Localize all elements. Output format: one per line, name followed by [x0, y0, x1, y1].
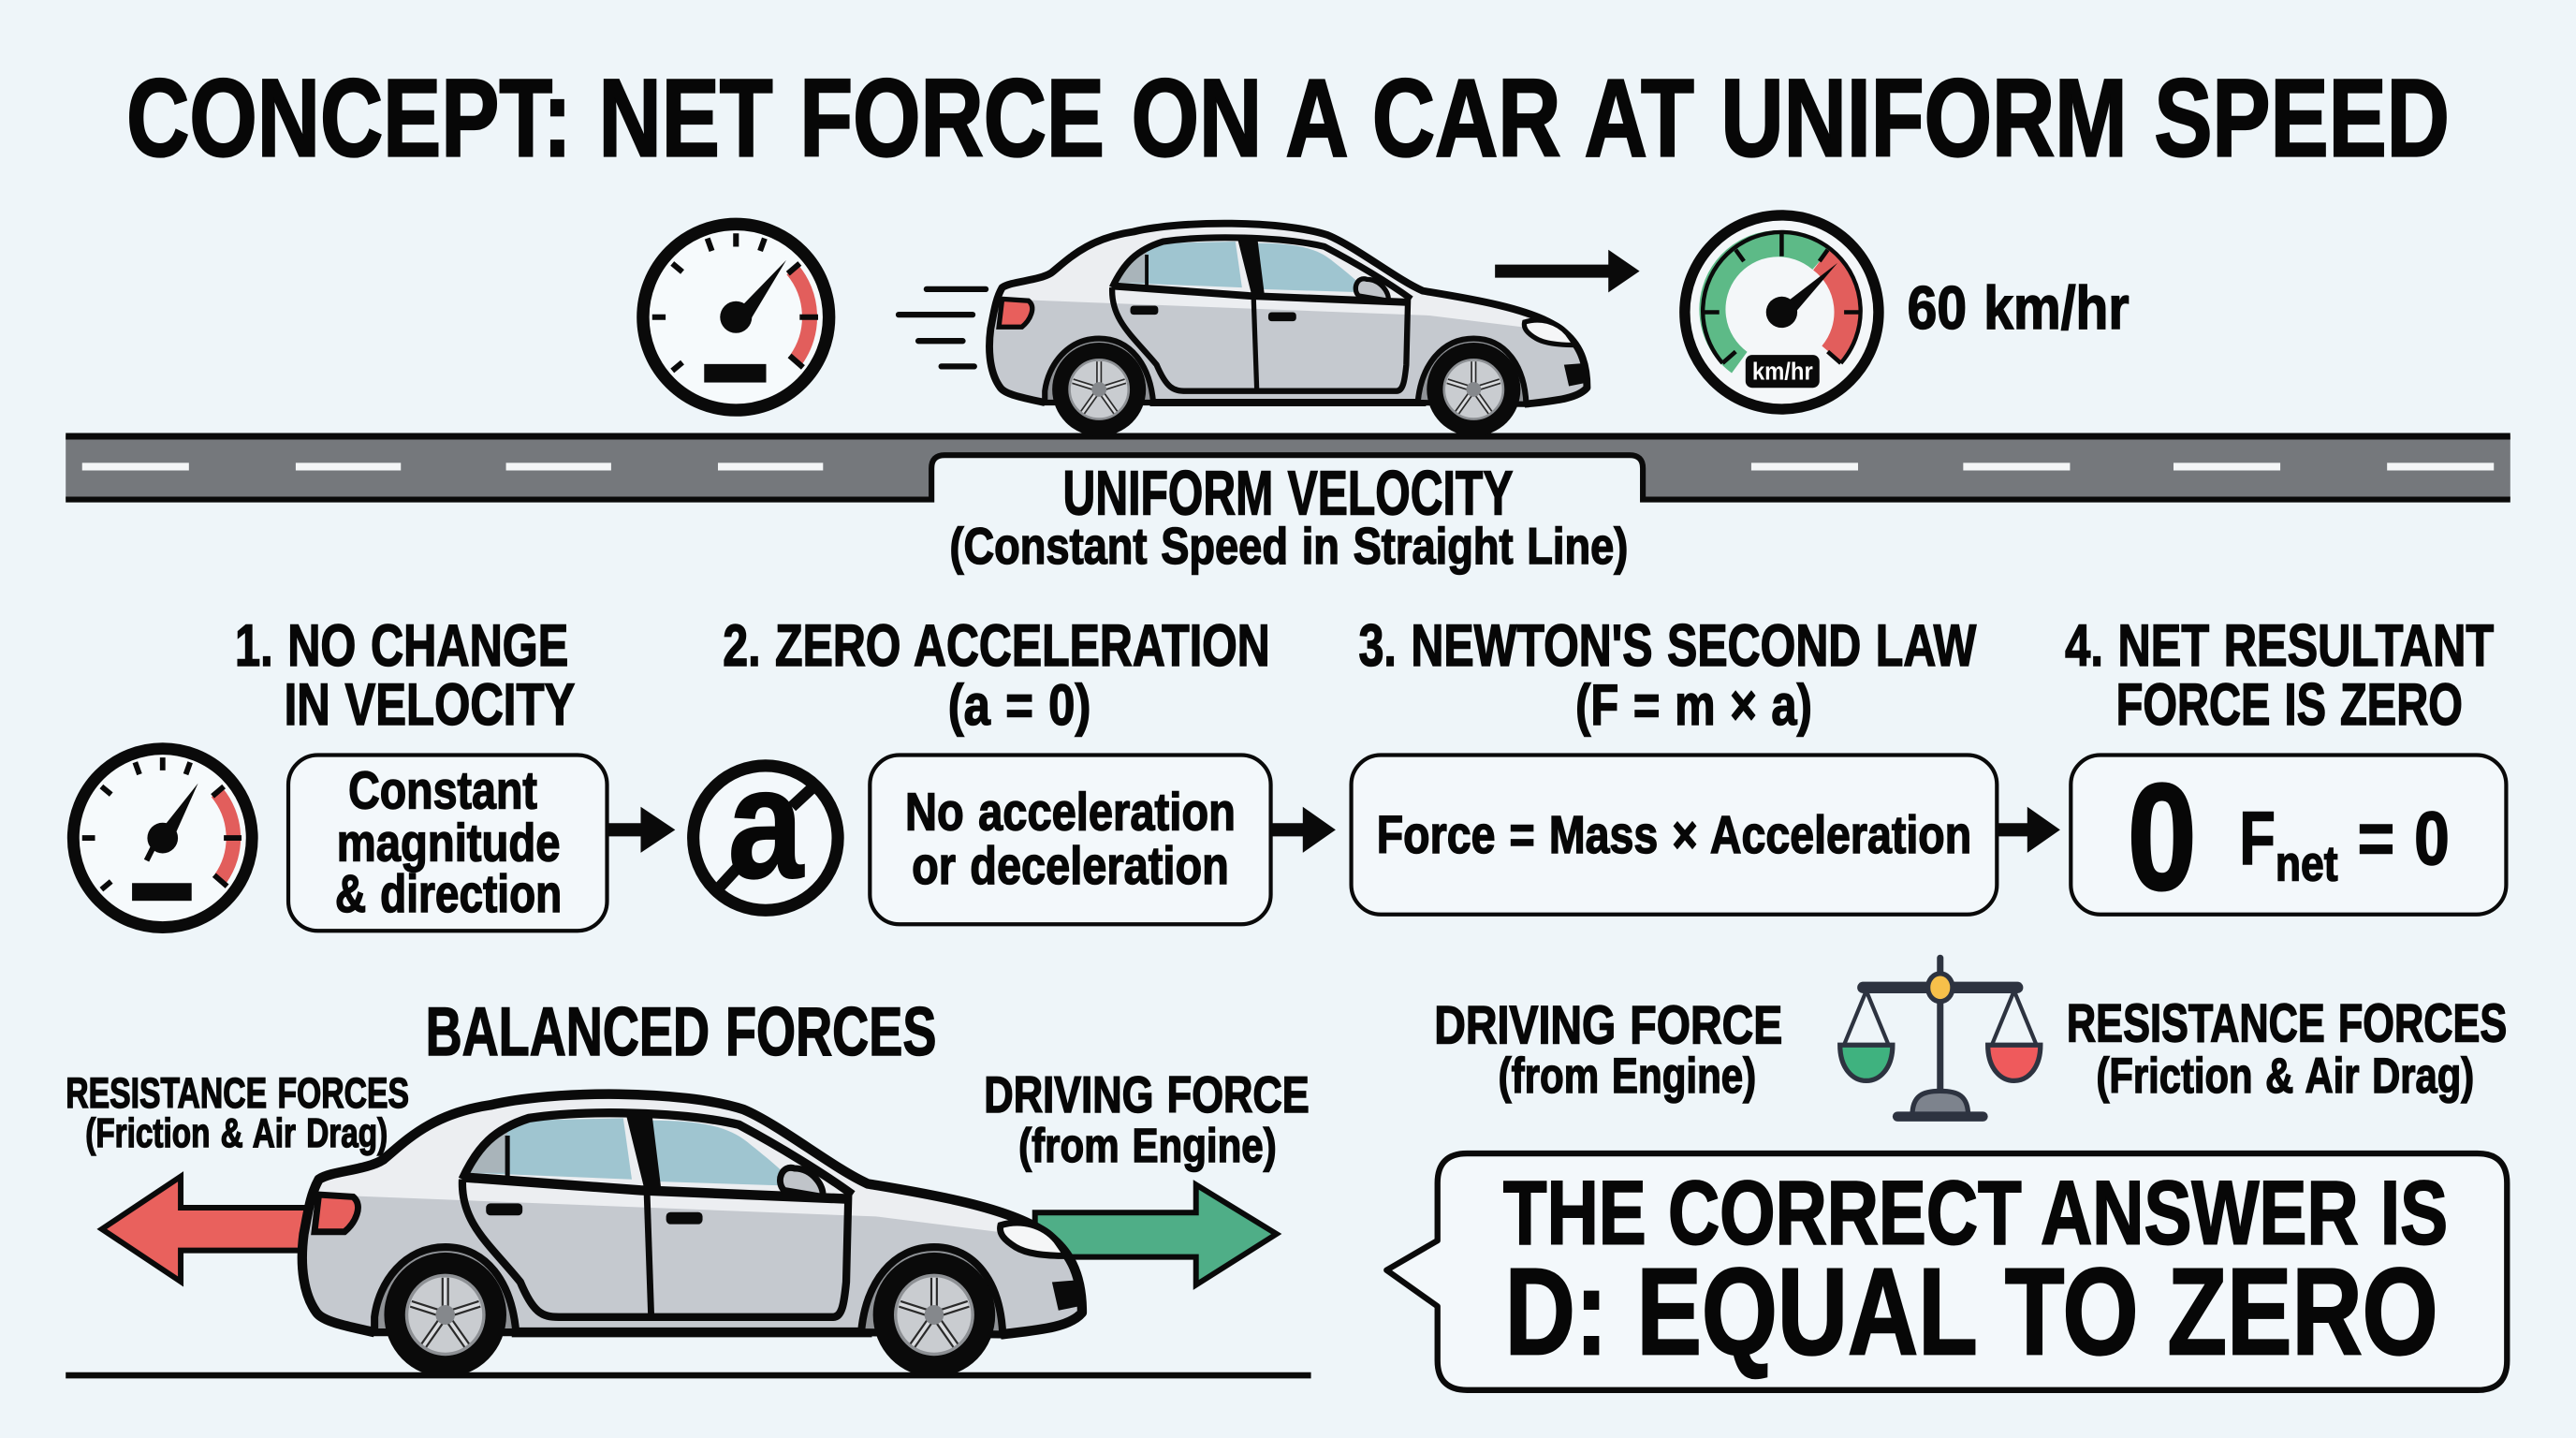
callout: correct answer — [1386, 1153, 2507, 1390]
box: net force zero: = 0 — [2358, 797, 2450, 881]
uniform velocity heading — [949, 459, 1628, 575]
step 2 heading — [723, 613, 1270, 738]
box: no acceleration or deceleration: or deceleration — [912, 836, 1229, 895]
resistance forces label, right panel: (Friction & Air Drag) — [2097, 1049, 2474, 1104]
icon: speedometer with colored zones — [1685, 215, 1879, 409]
driving force label, left panel: DRIVING FORCE — [984, 1066, 1310, 1123]
box: constant magnitude and direction: & direction — [335, 864, 562, 923]
step 3 heading: 3. NEWTON'S SECOND LAW — [1358, 613, 1977, 679]
icon: speed lines — [899, 289, 986, 366]
arrow: resistance force — [102, 1177, 329, 1282]
driving force label, left panel: (from Engine) — [1018, 1119, 1277, 1172]
icon: small speedometer — [73, 749, 252, 928]
step 3 heading: (F = m × a) — [1575, 673, 1812, 738]
resistance forces label, left: RESISTANCE FORCES — [66, 1069, 409, 1117]
step 4 heading — [2065, 613, 2494, 738]
resistance forces label, left: (Friction & Air Drag) — [85, 1110, 388, 1156]
arrow: step 1 to 2 — [607, 807, 675, 853]
icon: car with balanced forces — [286, 1081, 1102, 1377]
step 2 heading: 2. ZERO ACCELERATION — [723, 613, 1270, 679]
icon: balance scale — [1840, 958, 2041, 1117]
arrow: step 3 to 4 — [1998, 807, 2060, 853]
resistance forces label, left — [66, 1069, 409, 1156]
arrow: step 2 to 3 — [1271, 807, 1336, 853]
box: no acceleration or deceleration — [870, 755, 1271, 924]
speed label: 60 km/hr — [1908, 273, 2130, 342]
icon: no acceleration symbol — [694, 734, 838, 911]
box: net force zero: 0 — [2128, 754, 2197, 922]
box: constant magnitude and direction — [288, 755, 607, 931]
driving force label, left panel — [984, 1066, 1310, 1172]
driving force label, right panel: (from Engine) — [1499, 1049, 1756, 1104]
step 4 heading: FORCE IS ZERO — [2116, 672, 2463, 738]
step 1 heading — [235, 613, 575, 738]
driving force label, right panel: DRIVING FORCE — [1434, 995, 1782, 1055]
balanced forces heading: BALANCED FORCES — [426, 992, 936, 1070]
ground line — [66, 1373, 1311, 1377]
arrow: driving force — [1035, 1184, 1277, 1284]
icon: no acceleration symbol: a — [728, 734, 804, 911]
box: force equation: Force = Mass × Acceleration — [1377, 805, 1971, 864]
step 2 heading: (a = 0) — [948, 673, 1090, 738]
step 1 heading: 1. NO CHANGE — [235, 613, 568, 679]
arrow: direction of motion — [1495, 250, 1640, 292]
uniform velocity heading: UNIFORM VELOCITY — [1063, 459, 1513, 528]
icon: speedometer, top left — [643, 224, 829, 410]
resistance forces label, right panel — [2067, 994, 2507, 1104]
box: no acceleration or deceleration: No acceleration — [905, 782, 1236, 841]
step 1 heading: IN VELOCITY — [285, 672, 575, 738]
box: constant magnitude and direction: magnitude — [337, 814, 560, 873]
icon: speedometer with colored zones: km/hr — [1752, 357, 1813, 385]
box: constant magnitude and direction: Constant — [348, 761, 537, 820]
box: force equation — [1352, 755, 1997, 915]
driving force label, right panel — [1434, 995, 1782, 1104]
box: net force zero: F — [2239, 797, 2276, 881]
icon: car in motion — [977, 213, 1602, 436]
uniform velocity heading: (Constant Speed in Straight Line) — [949, 518, 1628, 575]
box: net force zero — [2071, 754, 2506, 922]
step 3 heading — [1358, 613, 1977, 738]
road with uniform velocity notch — [66, 435, 2510, 500]
box: net force zero: net — [2276, 837, 2338, 892]
